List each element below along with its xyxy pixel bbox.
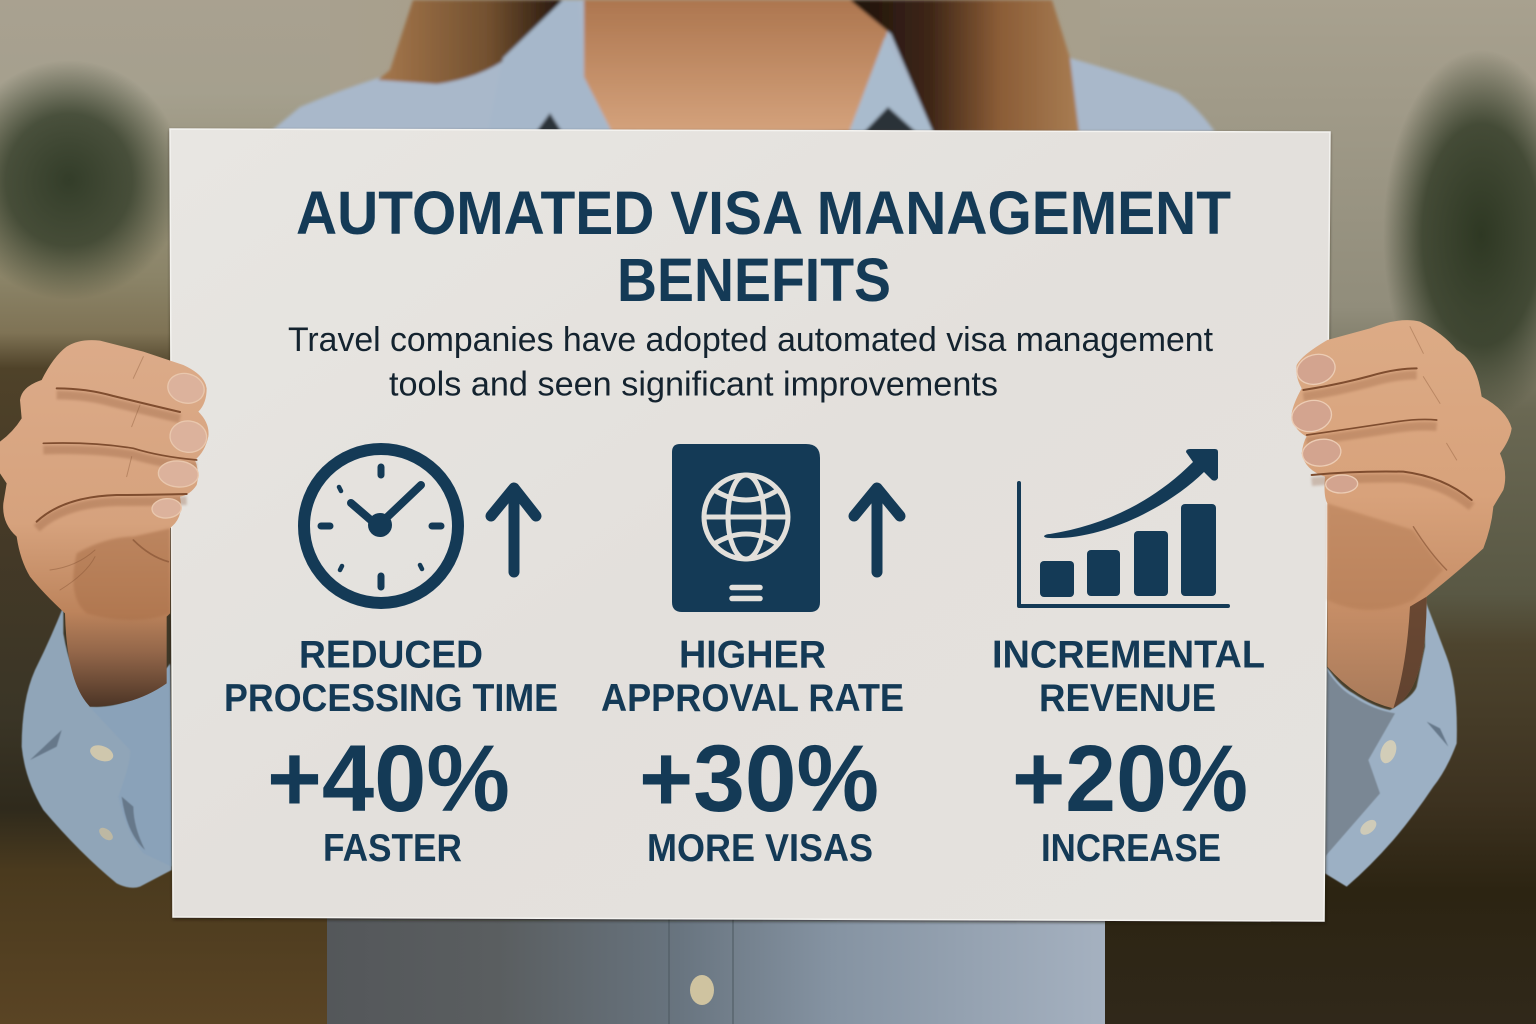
- label: incremental revenue: REVENUE: [1039, 677, 1216, 720]
- stat: +40%: +40%: [267, 726, 510, 832]
- icon: up arrow: [854, 488, 900, 572]
- shirt placket: [669, 918, 733, 1024]
- hair right: [850, 0, 1079, 132]
- right hand: [1289, 320, 1512, 708]
- subtitle: Travel companies have adopted automated visa management: [288, 321, 1214, 359]
- left sleeve: [22, 607, 172, 888]
- paper: [170, 129, 1330, 921]
- neck: [584, 0, 895, 132]
- icon: passport: [672, 444, 820, 612]
- lower shirt: [327, 915, 1105, 1024]
- caption: faster: FASTER: [323, 827, 462, 870]
- caption: more visas: MORE VISAS: [647, 827, 873, 870]
- shirt shoulders: [270, 0, 1215, 132]
- label: reduced processing time: REDUCED: [299, 634, 483, 676]
- finger creases: [37, 357, 197, 590]
- stat: +30%: +30%: [639, 726, 879, 832]
- label: higher approval rate: [601, 634, 904, 720]
- stat: +20%: +20%: [1012, 726, 1248, 832]
- sign board: [170, 129, 1330, 923]
- subtitle: tools and seen significant improvements: [389, 366, 998, 404]
- finger shadows: [37, 395, 197, 528]
- column: incremental revenue: [992, 449, 1265, 870]
- title: BENEFITS: [617, 246, 891, 315]
- caption: increase: INCREASE: [1041, 827, 1221, 870]
- label: reduced processing time: PROCESSING TIME: [224, 677, 558, 720]
- collar shadows: [536, 107, 916, 132]
- icon: up arrow: [491, 488, 536, 572]
- cuff buttons: [88, 742, 115, 764]
- palm shading: [73, 528, 170, 620]
- person: shirt, neck and hair: [270, 0, 1215, 1024]
- label: higher approval rate: APPROVAL RATE: [601, 677, 904, 720]
- icon: clock: [304, 449, 458, 603]
- collar right: [849, 37, 933, 132]
- title: [296, 179, 1231, 315]
- right sleeve: [1325, 600, 1457, 887]
- label: incremental revenue: [992, 634, 1265, 720]
- column: reduced processing time: [224, 449, 558, 870]
- icon: rising bar chart: [1019, 449, 1228, 606]
- title: AUTOMATED VISA MANAGEMENT: [296, 179, 1231, 248]
- right plant: [1340, 50, 1536, 420]
- collar left: [488, 0, 610, 132]
- wrist shadow: [1393, 597, 1427, 708]
- left hand: [0, 340, 209, 707]
- hair left: [378, 0, 563, 84]
- palm shading: [1327, 503, 1443, 610]
- fingernails: [151, 370, 208, 519]
- left plant: [0, 60, 230, 300]
- subtitle: [288, 321, 1214, 404]
- column: higher approval rate: [601, 444, 904, 870]
- cuff buttons: [1377, 738, 1399, 765]
- finger creases: [1303, 327, 1472, 570]
- shirt button: [690, 975, 714, 1005]
- paper shadow: [170, 130, 1330, 923]
- label: incremental revenue: INCREMENTAL: [992, 634, 1265, 676]
- label: reduced processing time: [224, 634, 558, 720]
- label: higher approval rate: HIGHER: [679, 634, 826, 676]
- fingernails: [1289, 350, 1358, 494]
- finger shadows: [1303, 375, 1472, 507]
